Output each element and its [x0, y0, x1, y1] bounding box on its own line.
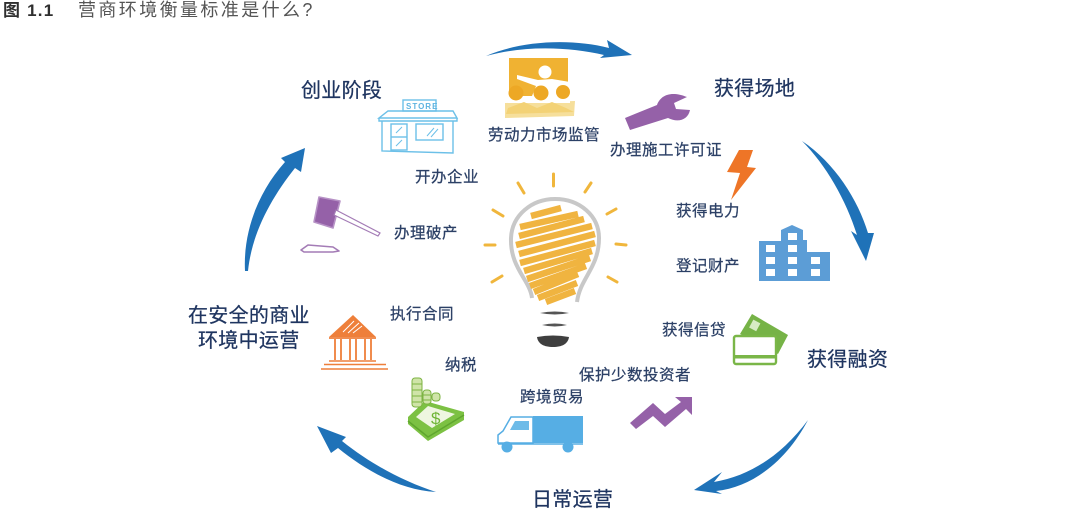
label: trading across borders: 跨境贸易 [520, 387, 584, 406]
icon: store [379, 100, 457, 153]
icon: rising chart arrow [630, 397, 692, 429]
arrow: bottom right, to operations stage [694, 420, 808, 494]
heading: operating in a safe business environment [188, 304, 310, 352]
label: starting a business: 开办企业 [415, 168, 479, 186]
icon: store: STORE [406, 102, 438, 111]
icon: buildings [759, 225, 830, 281]
heading: getting financing: 获得融资 [807, 348, 888, 371]
label: dealing with construction permits: 办理施工许可证 [610, 141, 722, 159]
icon: delivery truck [498, 416, 583, 452]
heading: startup: 创业阶段 [301, 79, 382, 102]
label: protecting minority investors: 保护少数投资者 [579, 366, 691, 384]
arrow: bottom left, to safe environment stage [317, 426, 436, 492]
label: getting credit: 获得信贷 [662, 321, 726, 339]
arrow: right, to financing stage [802, 141, 874, 261]
heading: operating in a safe business environment: 在安全的商业 [188, 304, 310, 327]
icon: bank building [321, 315, 388, 369]
title: 营商环境衡量标准是什么? [78, 0, 315, 20]
arrow: left, to startup stage [245, 148, 305, 271]
icon: money and coins: $ [431, 409, 441, 428]
icon: gavel [301, 197, 380, 252]
icon: labour market training [505, 58, 575, 118]
title: 图 1.1 [3, 1, 54, 20]
icon: light bulb [485, 174, 626, 347]
icon: wrench [625, 94, 690, 130]
label: resolving insolvency: 办理破产 [394, 224, 458, 242]
icon: lightning [727, 150, 756, 200]
icon: credit cards [734, 314, 788, 364]
label: getting electricity: 获得电力 [676, 202, 740, 220]
label: paying taxes: 纳税 [445, 356, 477, 374]
label: enforcing contracts: 执行合同 [390, 305, 454, 323]
icon: money and coins [408, 378, 464, 441]
heading: operating in a safe business environment: 环境中运营 [198, 329, 300, 352]
label: registering property: 登记财产 [676, 257, 740, 275]
heading: getting a location: 获得场地 [714, 77, 795, 100]
label: labour market regulation: 劳动力市场监管 [488, 126, 600, 144]
arrow: top, to site stage [486, 40, 632, 58]
